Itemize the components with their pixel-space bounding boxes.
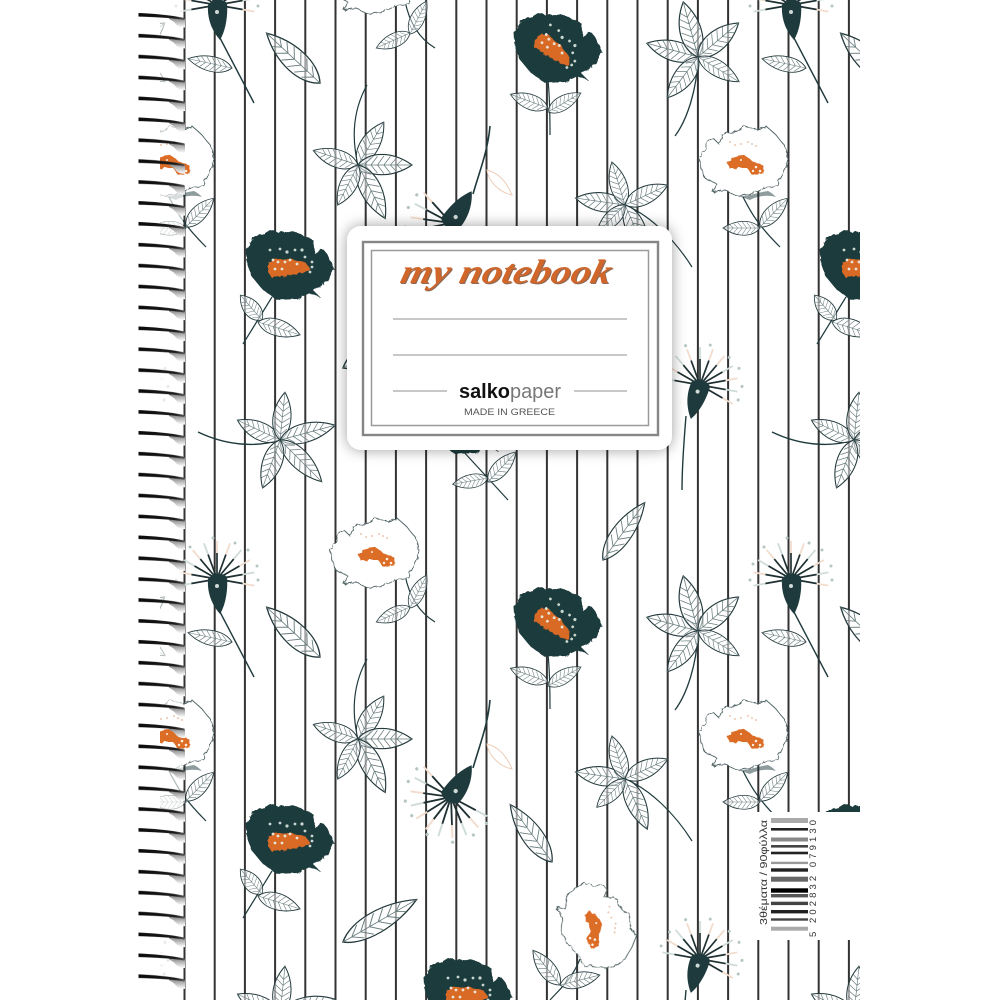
writing lines bbox=[393, 319, 627, 391]
notebook cover bbox=[160, 0, 860, 1000]
single leaf bbox=[602, 502, 646, 561]
repeated floral pattern bbox=[160, 0, 860, 1000]
dandelion with leaf bbox=[174, 0, 260, 103]
single leaf bbox=[337, 316, 422, 377]
white wash over binding margin bbox=[141, 0, 183, 1000]
vertical stripes bbox=[184, 0, 849, 1000]
brand: salkopaper bbox=[459, 381, 561, 403]
outer frame bbox=[363, 242, 658, 435]
inverted dandelion bbox=[387, 126, 510, 287]
inner frame bbox=[372, 250, 648, 426]
five leaf cluster bbox=[198, 391, 337, 491]
label card bbox=[347, 226, 672, 450]
product info: 3θέματα / 90φύλλα bbox=[759, 820, 770, 925]
single leaf bbox=[259, 25, 327, 92]
barcode digits: 5 202832 079130 bbox=[808, 820, 819, 937]
faint peach leaf bbox=[487, 170, 512, 195]
barcode panel bbox=[755, 812, 860, 940]
spiral binding bbox=[130, 7, 186, 989]
dark flower with leaves bbox=[424, 384, 521, 500]
dark flower with leaves bbox=[508, 13, 602, 135]
rotated white flower with leaves bbox=[532, 882, 638, 1000]
dandelion bbox=[648, 331, 754, 490]
title: my notebook bbox=[397, 253, 616, 291]
white flower with leaves bbox=[699, 126, 793, 247]
made in greece: MADE IN GREECE bbox=[464, 407, 555, 418]
single leaf bbox=[510, 804, 553, 863]
label bbox=[347, 226, 672, 450]
five leaf cluster bbox=[574, 160, 692, 267]
white sticker bbox=[755, 812, 860, 940]
barcode bars bbox=[771, 818, 808, 931]
white flower with leaves bbox=[330, 518, 435, 629]
orange flower centres in binding margin bbox=[160, 141, 190, 749]
title: my notebook bbox=[398, 254, 617, 292]
dark poppy with leaves bbox=[234, 230, 334, 344]
five leaf cluster bbox=[644, 0, 745, 136]
five leaf cluster bbox=[310, 85, 412, 223]
floral pattern tile bbox=[174, 0, 793, 629]
